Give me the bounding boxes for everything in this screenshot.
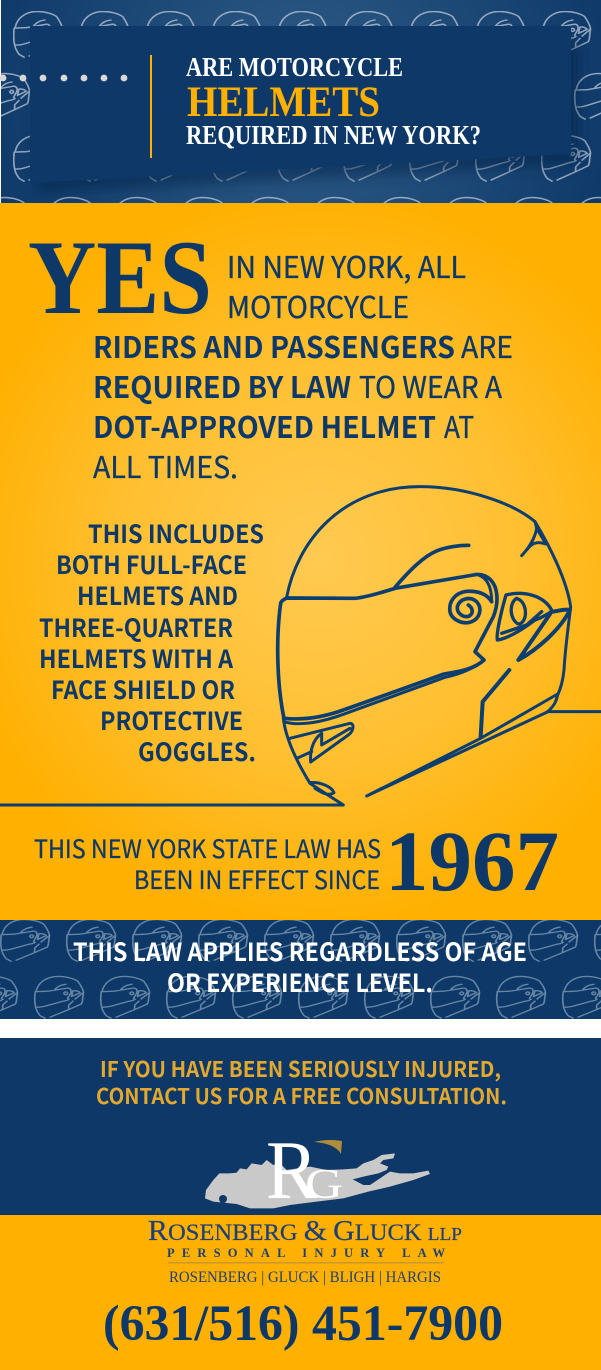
helmet types text: GOGGLES.	[138, 733, 256, 769]
contact text: CONTACT US FOR A FREE CONSULTATION.	[96, 1080, 507, 1111]
helmet types text: THIS INCLUDES	[88, 515, 264, 551]
footer panel	[0, 1215, 601, 1370]
main statement: MOTORCYCLE	[227, 283, 409, 327]
band text: OR EXPERIENCE LEVEL.	[167, 964, 433, 1000]
decorative dots	[0, 75, 127, 81]
main statement: REQUIRED BY LAW	[93, 363, 351, 407]
main statement: RIDERS AND PASSENGERS	[93, 323, 455, 367]
firm name: ROSENBERG & GLUCK LLP	[148, 1216, 462, 1247]
panel shadow	[36, 40, 578, 193]
main statement: DOT-APPROVED HELMET	[93, 403, 436, 447]
main statement: AT	[444, 403, 474, 447]
main statement: TO WEAR A	[359, 363, 503, 407]
helmet types text: PROTECTIVE	[100, 702, 243, 738]
helmet types text: HELMETS WITH A	[39, 640, 234, 676]
main statement: ALL TIMES.	[93, 443, 238, 487]
band text	[73, 933, 527, 1000]
tagline: PERSONAL INJURY LAW	[167, 1246, 446, 1260]
logo: Long Island with RG monogram: G	[305, 1162, 343, 1208]
title text: REQUIRED IN NEW YORK?	[186, 120, 481, 150]
effective since statement	[34, 830, 381, 897]
logo: Long Island with RG monogram: R	[266, 1124, 318, 1217]
title text: ARE MOTORCYCLE	[186, 52, 403, 82]
helmet types text: FACE SHIELD OR	[51, 671, 235, 707]
band text: THIS LAW APPLIES REGARDLESS OF AGE	[73, 933, 527, 969]
helmet types text: BOTH FULL-FACE	[56, 546, 247, 582]
yellow main panel	[0, 203, 601, 920]
helmet line illustration	[0, 487, 601, 805]
effective since statement: THIS NEW YORK STATE LAW HAS	[34, 830, 381, 866]
helmet types text: THREE-QUARTER	[39, 609, 233, 645]
header band with helmet pattern	[1, 0, 601, 203]
phone number: (631/516) 451-7900	[103, 1296, 503, 1352]
title divider	[150, 55, 152, 158]
title text: HELMETS	[187, 79, 380, 126]
effective since statement: BEEN IN EFFECT SINCE	[134, 861, 380, 897]
tagline rule	[168, 1262, 444, 1264]
main statement: IN NEW YORK, ALL	[227, 243, 466, 287]
law applies band	[0, 920, 601, 1019]
partner names: ROSENBERG | GLUCK | BLIGH | HARGIS	[169, 1269, 441, 1286]
logo: Long Island with RG monogram	[205, 1124, 430, 1217]
header title panel	[0, 26, 571, 183]
title text	[186, 52, 481, 150]
contact text: IF YOU HAVE BEEN SERIOUSLY INJURED,	[100, 1053, 501, 1084]
year 1967: 1967	[385, 813, 559, 909]
main statement: ARE	[461, 323, 513, 367]
contact panel	[0, 1038, 601, 1217]
helmet types text: HELMETS AND	[77, 577, 238, 613]
main statement	[93, 243, 513, 487]
YES heading: YES	[28, 219, 212, 336]
helmet types text	[39, 515, 264, 769]
contact text	[96, 1053, 507, 1111]
